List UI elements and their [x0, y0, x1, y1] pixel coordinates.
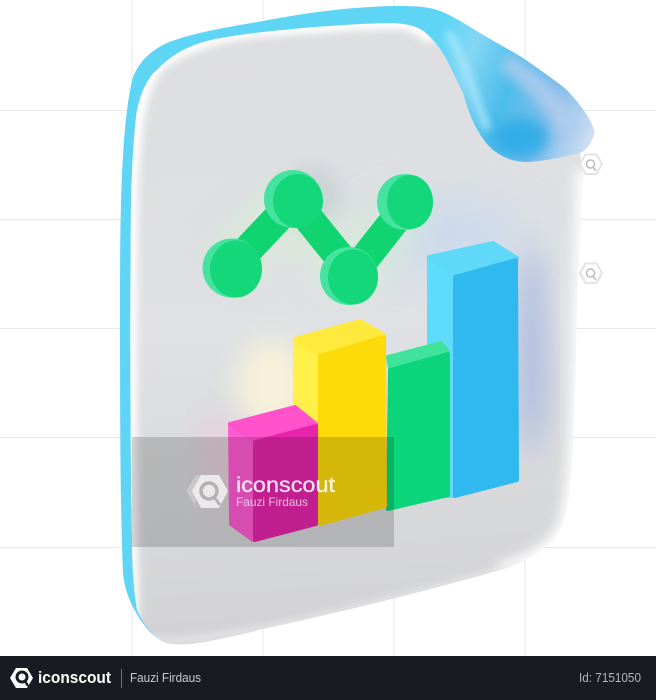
document icon: [120, 6, 594, 644]
paper front sheet: [130, 23, 583, 644]
paper back edge: blue: [120, 6, 430, 640]
footer author: Fauzi Firdaus: [130, 671, 201, 685]
glow: blue bar shadow: [518, 245, 546, 455]
connector segments: [240, 203, 406, 270]
glow: warm tint left of bars: [231, 336, 293, 418]
curl deep blue pool: [492, 118, 548, 158]
watermark: central logo and credit: [186, 474, 335, 509]
paper corner curl: [393, 6, 594, 162]
small watermark icon lower: [580, 264, 602, 283]
watermark band: [132, 437, 394, 547]
curl lavender fold: [505, 60, 570, 130]
node 4: [377, 174, 433, 230]
node 1: [202, 238, 262, 298]
glow: green under line chart: [237, 212, 416, 268]
pink bar: [230, 407, 316, 540]
line chart: [202, 170, 433, 305]
paper shading and bevel: [130, 22, 584, 641]
blue bar: [429, 243, 517, 496]
watermark author: Fauzi Firdaus: [236, 495, 308, 509]
curl light streak: [448, 32, 488, 130]
footer brand: iconscout: [38, 668, 111, 687]
bar chart: [230, 243, 517, 540]
footer id: Id: 7151050: [579, 671, 641, 685]
footer divider: [121, 669, 122, 688]
glow: pink tint left of pink bar: [206, 427, 228, 482]
glow: pale blue around bars: [400, 197, 515, 271]
green bar: [388, 343, 448, 509]
footer logo: [10, 668, 33, 688]
small watermark icon upper: [580, 154, 602, 174]
watermark logo: [186, 475, 228, 508]
footer bar: [0, 656, 656, 700]
node 3: [320, 247, 378, 305]
watermark brand: iconscout: [236, 474, 335, 497]
yellow bar: [295, 321, 385, 524]
node drop shadow: [298, 166, 342, 220]
node 2: [264, 170, 323, 228]
